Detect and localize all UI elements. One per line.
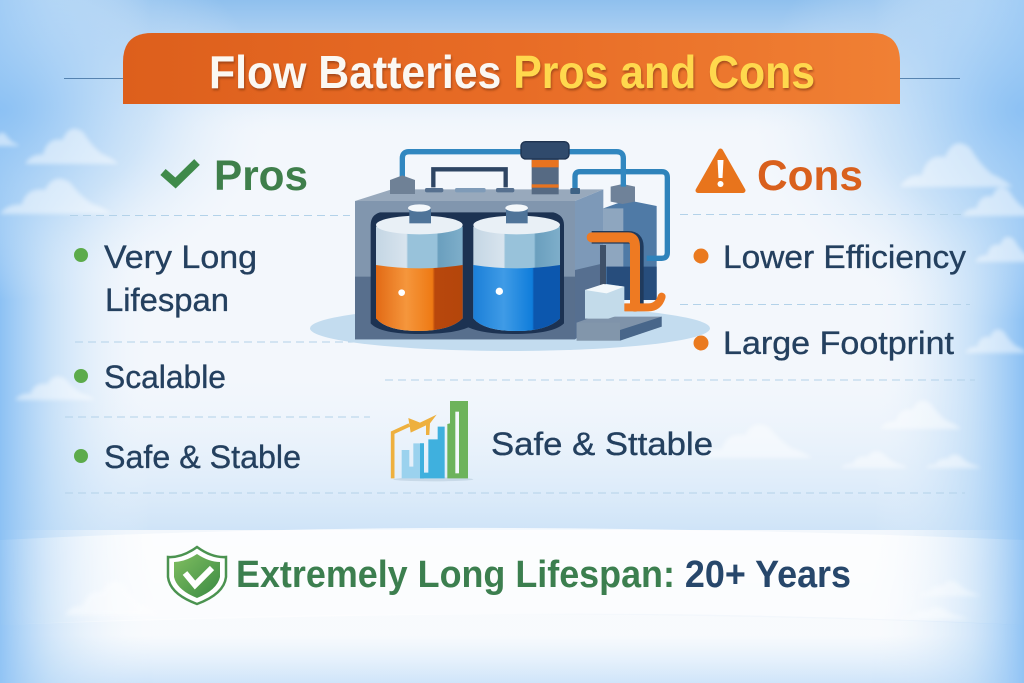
icon: warning triangle bbox=[698, 151, 743, 190]
stem bbox=[600, 245, 606, 285]
con: lower efficiency: Lower Efficiency bbox=[723, 239, 966, 275]
base shadow bbox=[310, 306, 710, 351]
handle bbox=[425, 169, 514, 192]
white block bbox=[585, 284, 624, 319]
pipe: right blue pipe bbox=[575, 172, 667, 258]
pipe: orange pipe bbox=[592, 237, 637, 307]
section dividers bbox=[65, 214, 975, 493]
valve bbox=[521, 142, 569, 194]
pipe: top blue pipe bbox=[402, 152, 623, 187]
icon: growth chart bbox=[393, 401, 473, 481]
title: Flow Batteries Pros and Cons bbox=[209, 46, 815, 98]
con: large footprint: Large Footprint bbox=[723, 325, 954, 361]
lower band bbox=[0, 614, 1024, 683]
icon: check mark bbox=[163, 162, 197, 183]
title banner bbox=[123, 33, 900, 104]
upper band bbox=[0, 528, 1024, 625]
header rules bbox=[64, 78, 960, 80]
pro: scalable: Scalable bbox=[104, 359, 226, 395]
center label: Safe & Sttable bbox=[491, 426, 713, 462]
cons heading: Cons bbox=[757, 152, 863, 200]
pros heading bbox=[163, 152, 308, 200]
pros heading: Pros bbox=[214, 152, 308, 200]
pro: very long lifespan: Very Long bbox=[104, 239, 257, 275]
left cap bbox=[390, 175, 415, 194]
panel: cons bbox=[694, 151, 966, 361]
pump base bbox=[577, 317, 662, 341]
footer callout: Extremely Long Lifespan: 20+ Years bbox=[236, 554, 851, 596]
orange tank bbox=[376, 204, 463, 331]
small port bbox=[570, 188, 580, 194]
pro: safe and stable: Safe & Stable bbox=[104, 439, 301, 475]
tank frame bbox=[371, 212, 564, 334]
icon: shield check bbox=[168, 547, 226, 604]
cons heading bbox=[698, 151, 863, 200]
footer callout bbox=[168, 547, 851, 604]
illustration: flow battery bbox=[310, 142, 710, 351]
pro: very long lifespan bbox=[74, 239, 257, 318]
clouds bbox=[0, 129, 1024, 468]
main housing bbox=[355, 189, 603, 339]
panel: pros bbox=[74, 152, 308, 475]
rear tank bbox=[603, 184, 657, 300]
pro: very long lifespan: Lifespan bbox=[105, 282, 229, 318]
blue tank bbox=[473, 204, 560, 331]
